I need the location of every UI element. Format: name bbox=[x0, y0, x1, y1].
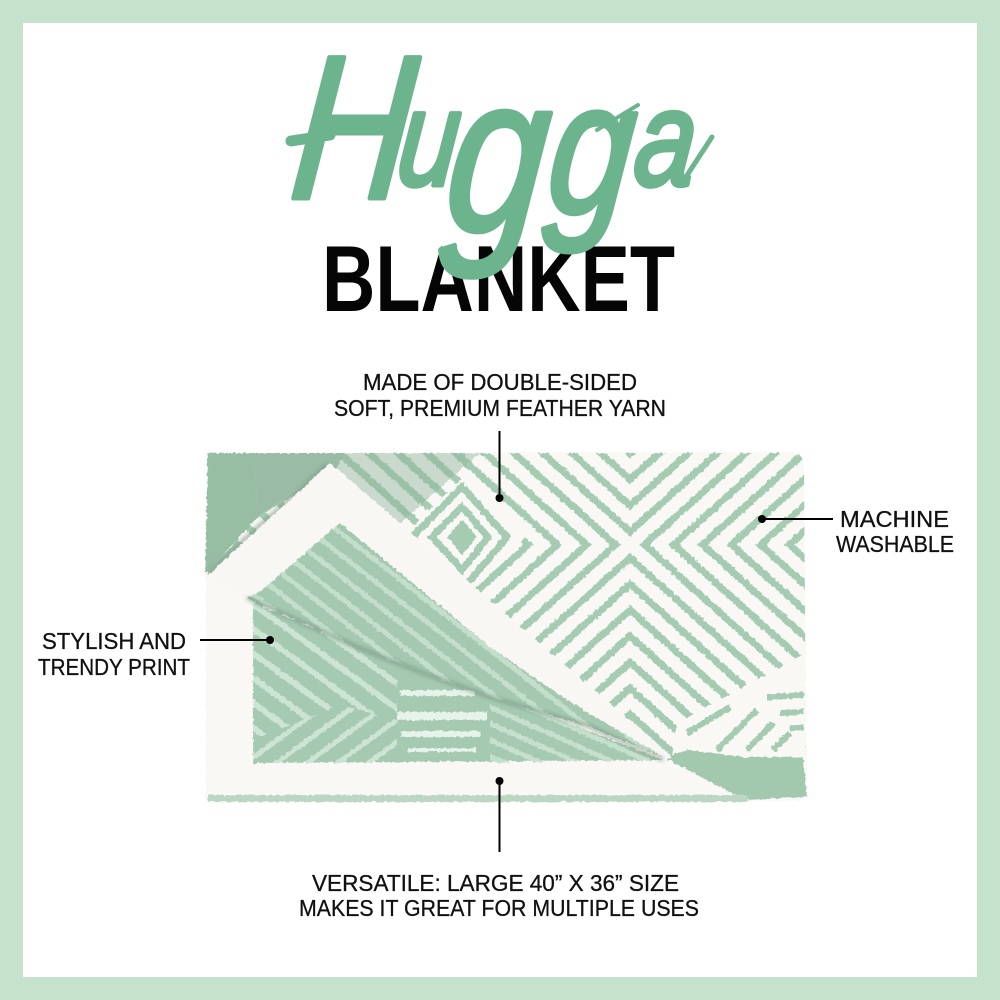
brush tails bbox=[291, 105, 712, 183]
left stripes bbox=[253, 603, 397, 740]
title: Hugga script: a bbox=[629, 63, 704, 214]
lower green panel bbox=[253, 603, 665, 763]
bottom label text: VERSATILE: LARGE 40” X 36” SIZE bbox=[312, 870, 679, 896]
callout: top bbox=[334, 369, 666, 502]
title: Hugga script: g bbox=[540, 43, 645, 254]
lower left stripes bbox=[253, 705, 397, 763]
dark green corner top left bbox=[205, 453, 258, 573]
folded green triangle bbox=[247, 523, 663, 757]
right label text: MACHINE bbox=[840, 506, 949, 532]
title: Hugga script: u bbox=[392, 63, 467, 214]
title: Hugga script bbox=[280, 14, 712, 278]
blanket bbox=[205, 452, 808, 803]
upper geometric pattern bbox=[208, 453, 808, 760]
central horizontal stripes bbox=[397, 690, 487, 752]
bottom right dark corner bbox=[663, 750, 807, 800]
callout: left: TRENDY PRINT bbox=[38, 654, 190, 680]
callout: bottom: MAKES IT GREAT FOR MULTIPLE USES bbox=[299, 895, 699, 921]
blanket base bbox=[206, 452, 807, 803]
fold line shadow bbox=[247, 598, 663, 760]
callout: right bbox=[758, 506, 954, 557]
callout: right: WASHABLE bbox=[836, 531, 954, 557]
grey-green shaded top strip bbox=[253, 453, 345, 517]
right stripes bbox=[490, 704, 651, 764]
white left margin of lower panel bbox=[206, 578, 253, 765]
left label text: STYLISH AND bbox=[42, 628, 186, 654]
title: Hugga script: g bbox=[437, 30, 561, 278]
nested diamond motif bbox=[410, 478, 526, 584]
fold shadow on top left corner bbox=[208, 465, 328, 573]
top label text: MADE OF DOUBLE-SIDED bbox=[363, 369, 637, 395]
bottom mottled strip bbox=[208, 795, 748, 802]
callout: left bbox=[38, 628, 274, 680]
folded white band bbox=[205, 463, 672, 760]
lower right motif bbox=[672, 653, 806, 760]
title: BLANKET: BLANKET bbox=[322, 226, 675, 331]
callout: bottom bbox=[299, 777, 699, 921]
callout: top: SOFT, PREMIUM FEATHER YARN bbox=[334, 395, 666, 421]
title: Hugga script: H bbox=[284, 14, 425, 242]
